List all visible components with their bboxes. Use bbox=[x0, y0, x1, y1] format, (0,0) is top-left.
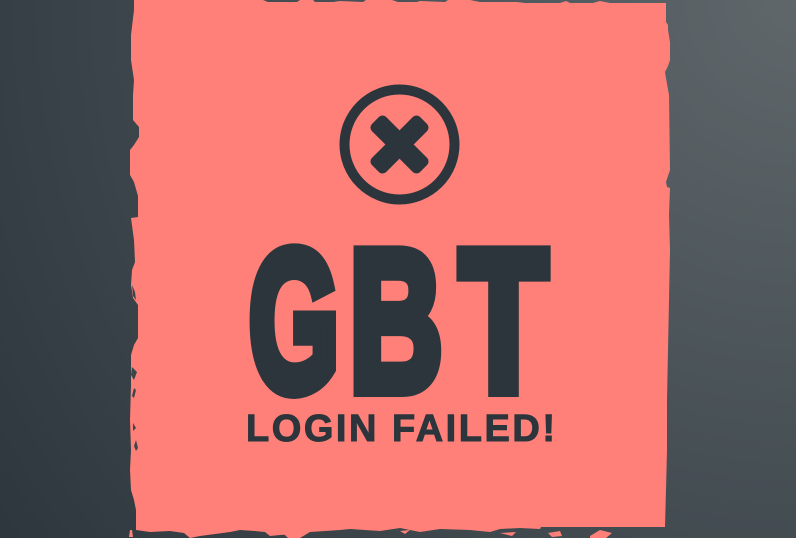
heading: GBT: B bbox=[349, 209, 443, 433]
icon: cross in circle bbox=[344, 90, 454, 200]
panel: distressed coral square bbox=[129, 0, 670, 538]
heading: GBT bbox=[249, 209, 547, 433]
heading: GBT: G bbox=[249, 209, 339, 433]
heading: GBT: T bbox=[460, 209, 547, 433]
subheading: login failed: LOGIN FAILED! bbox=[246, 408, 555, 450]
